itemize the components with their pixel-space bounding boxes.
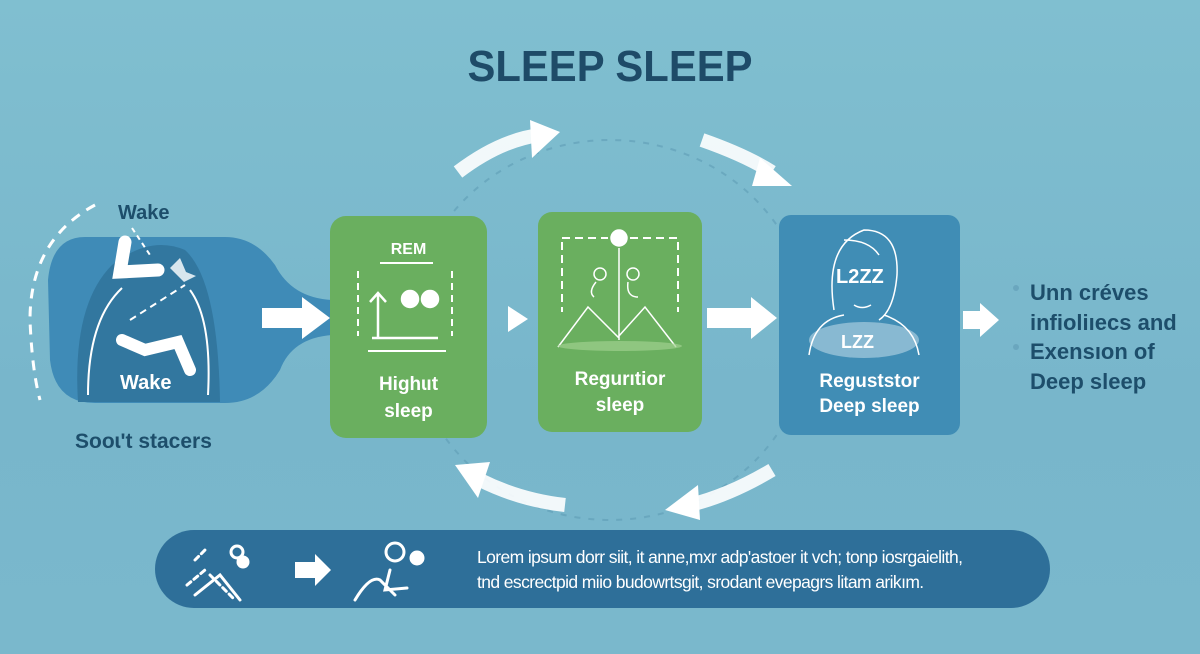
label: Wake bottom: Wake [120, 372, 172, 394]
icon: person waking [77, 228, 220, 402]
icon: REM chart [370, 291, 438, 338]
icon: arrow [295, 554, 331, 586]
text: lorem: tnd escrectpid miio budowrtsgit, srodant evepagrs litam arikım. [477, 572, 924, 592]
text: right bullets [1030, 280, 1177, 394]
dashed arc left [30, 205, 95, 400]
text: right bullets: infioliıecs and [1030, 310, 1177, 334]
text: Soo stacers: Sooɩ't stacers [75, 430, 212, 453]
arrow: to deep [707, 297, 777, 339]
arrow: bottom left curve [455, 462, 565, 505]
panel: Regurtior sleep: Regurıtior [575, 369, 665, 390]
icon: sun and mountains [558, 230, 676, 347]
panel: REM: REM [391, 241, 426, 258]
panel: Deep sleep: Regustst​or [819, 371, 920, 392]
arrow: to text [963, 303, 999, 337]
panel: REM: sleep [384, 401, 433, 422]
panel: Deep sleep [779, 215, 960, 435]
arrow: top left curve [458, 120, 560, 172]
panel: Deep sleep: Deep sleep [819, 396, 920, 417]
text: right bullets: Unn créves [1030, 280, 1149, 305]
icon: person relaxing [355, 543, 423, 600]
panel: REM [330, 216, 487, 438]
panel: bottom bar [155, 530, 1050, 608]
panel: Regurtior sleep [538, 212, 702, 432]
bullets [1013, 285, 1019, 291]
panel: Deep sleep: L2ZZ [836, 266, 884, 288]
label: Wake top: Wake [118, 202, 170, 224]
arrow: small [508, 306, 528, 332]
panel: Regurtior sleep: sleep [596, 395, 644, 416]
arrow: bottom right curve [665, 470, 772, 520]
panel: wake [48, 202, 330, 403]
icon: person falling [187, 546, 248, 600]
arrow: wake to REM [262, 297, 330, 339]
arrow: top right curve [702, 140, 792, 186]
text: lorem: Lorem ipsum dorr siit, it anne,mxr adp'astoer it vch; tonp iosrgaielith, [477, 547, 962, 567]
text: lorem [477, 547, 962, 592]
panel: Deep sleep: LZZ [841, 332, 874, 352]
text: right bullets: Deep sleep [1030, 368, 1146, 394]
icon: sleeping head [809, 230, 919, 355]
panel: REM: Highɩıt [379, 374, 438, 395]
text: right bullets: Exensıon of [1030, 339, 1155, 364]
title: SLEEP SLEEP [468, 42, 752, 91]
